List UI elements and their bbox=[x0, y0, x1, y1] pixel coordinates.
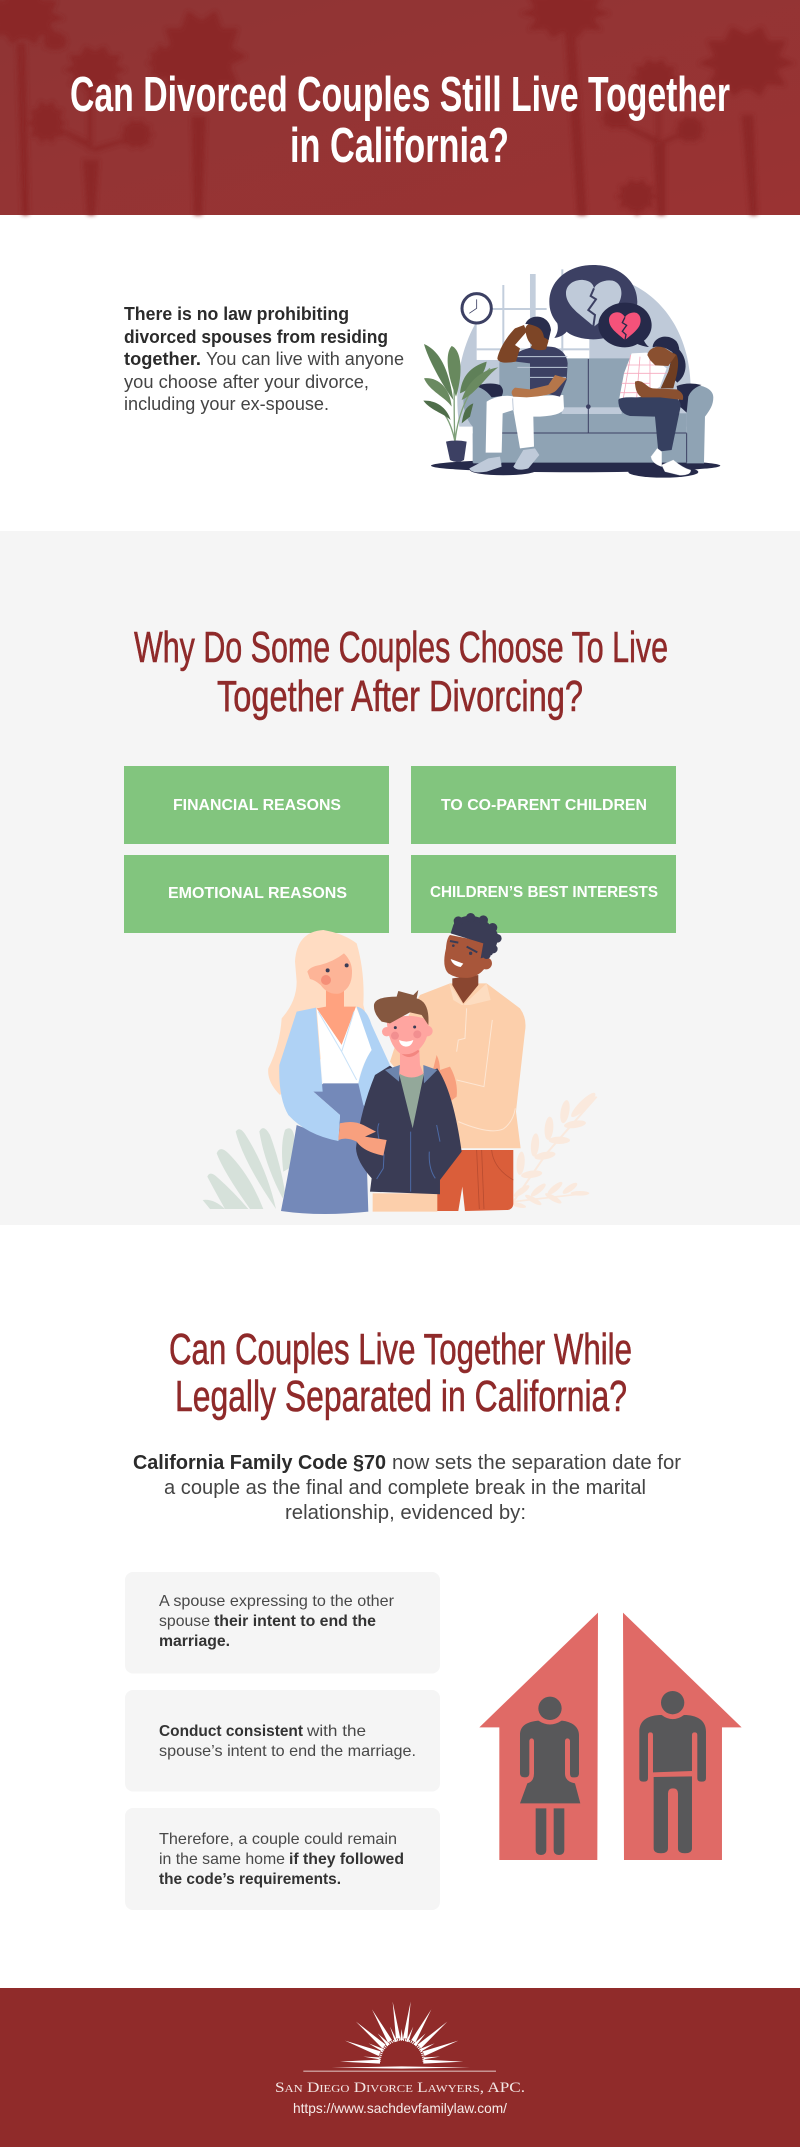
intro text: together. bbox=[124, 349, 201, 369]
reason box: co-parent bbox=[411, 766, 676, 844]
house right half bbox=[623, 1613, 742, 1860]
sofa bbox=[463, 358, 713, 463]
palm silhouettes bbox=[0, 0, 795, 215]
intro text: There is no law prohibiting bbox=[124, 304, 349, 324]
reason box: emotional bbox=[124, 855, 389, 933]
card: conduct: with the bbox=[306, 1723, 366, 1740]
card: intent: A spouse expressing to the other bbox=[159, 1593, 395, 1610]
card: conduct: Conduct consistent bbox=[159, 1723, 304, 1740]
card: same home bbox=[125, 1808, 440, 1910]
house left half bbox=[479, 1613, 598, 1860]
card: conduct: spouse’s intent to end the marriage. bbox=[159, 1743, 416, 1760]
illustration: couple on a sofa bbox=[423, 265, 720, 478]
footer bbox=[0, 1988, 800, 2147]
reason box: children's best interests bbox=[411, 855, 676, 933]
card: same home: in the same home bbox=[159, 1851, 285, 1868]
card: intent: marriage. bbox=[159, 1633, 230, 1650]
header banner bbox=[0, 0, 800, 215]
title: in California? bbox=[290, 119, 509, 173]
man figure bbox=[639, 1691, 706, 1853]
intro text: you choose after your divorce, bbox=[124, 372, 369, 392]
website: https://www.sachdevfamilylaw.com/ bbox=[293, 2100, 507, 2116]
branch right bbox=[510, 1090, 598, 1209]
paragraph: family code: now sets the separation date for bbox=[392, 1452, 681, 1474]
icon: split house with woman and man bbox=[479, 1613, 742, 1860]
card: same home: Therefore, a couple could remain bbox=[159, 1831, 397, 1848]
intro text bbox=[124, 304, 404, 414]
paragraph: family code: a couple as the final and complete break in the marital bbox=[164, 1477, 646, 1499]
plant bbox=[423, 344, 498, 462]
card: intent: their intent to end the bbox=[214, 1613, 376, 1630]
paragraph: family code: California Family Code §70 bbox=[133, 1452, 386, 1474]
heading: legally separated: Legally Separated in California? bbox=[175, 1372, 627, 1421]
floor shadow bbox=[431, 459, 720, 478]
heading: why couples live together bbox=[134, 623, 668, 721]
clock bbox=[462, 294, 491, 323]
logo: rising sun bbox=[303, 2002, 496, 2072]
card: intent bbox=[125, 1572, 440, 1674]
heading: why couples live together: Together After Divorcing? bbox=[217, 672, 583, 721]
speech bubble: grey broken heart bbox=[549, 265, 637, 339]
woman figure bbox=[520, 1697, 580, 1855]
reason box: children's best interests: CHILDREN’S BEST INTERESTS bbox=[430, 884, 658, 901]
card: conduct bbox=[125, 1690, 440, 1792]
man bbox=[469, 317, 568, 472]
title bbox=[70, 68, 730, 173]
illustration: family bbox=[203, 913, 598, 1214]
intro text: divorced spouses from residing bbox=[124, 327, 388, 347]
back arch and window bbox=[457, 269, 691, 427]
paragraph: family code bbox=[133, 1452, 681, 1524]
heading: legally separated bbox=[169, 1325, 632, 1421]
paragraph: family code: relationship, evidenced by: bbox=[285, 1502, 526, 1524]
reason box: emotional: EMOTIONAL REASONS bbox=[168, 885, 347, 902]
leaves left bbox=[203, 1128, 295, 1209]
intro text: including your ex-spouse. bbox=[124, 394, 329, 414]
reason box: co-parent: TO CO-PARENT CHILDREN bbox=[441, 797, 647, 814]
firm name: San Diego Divorce Lawyers, APC. bbox=[275, 2080, 525, 2096]
section background: why couples live together bbox=[0, 531, 800, 1225]
card: same home: the code’s requirements. bbox=[159, 1871, 341, 1888]
intro text: You can live with anyone bbox=[206, 349, 404, 369]
card: intent: spouse bbox=[159, 1613, 210, 1630]
woman bbox=[618, 337, 691, 475]
card: same home: if they followed bbox=[289, 1851, 404, 1868]
father bbox=[390, 913, 526, 1211]
mother bbox=[268, 930, 390, 1214]
reason box: financial bbox=[124, 766, 389, 844]
son bbox=[338, 990, 462, 1212]
speech bubble: pink broken heart bbox=[598, 303, 652, 347]
reason box: financial: FINANCIAL REASONS bbox=[173, 797, 341, 814]
